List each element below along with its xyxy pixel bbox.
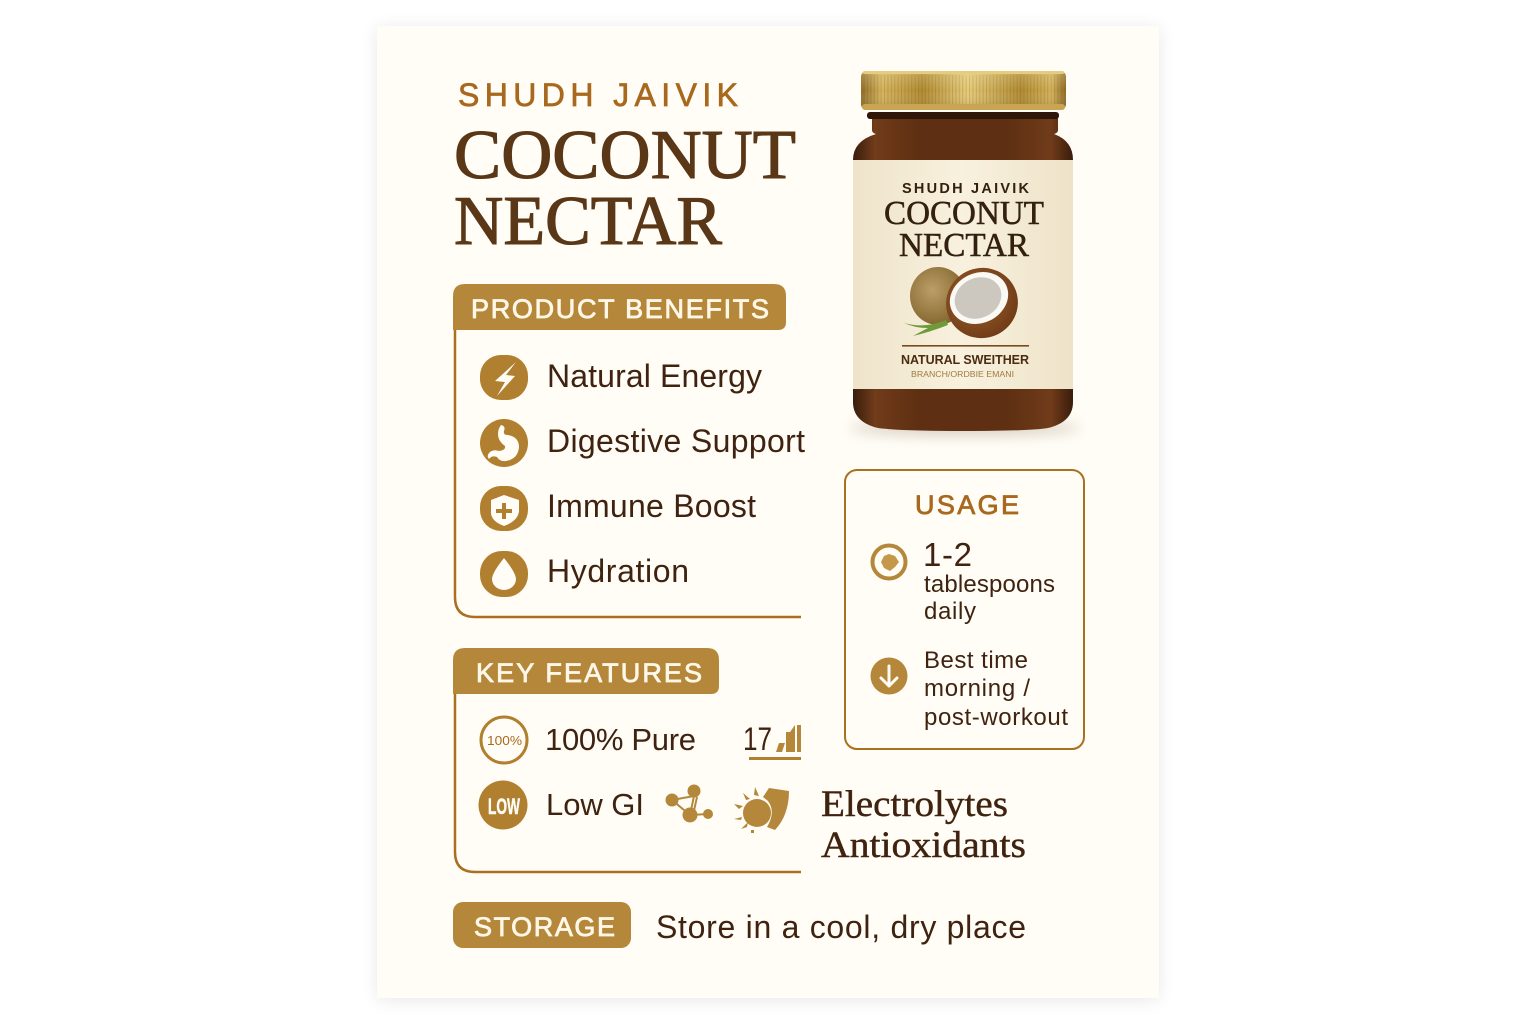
usage amount <box>923 536 1055 625</box>
feature: 100% pure: 100% Pure <box>545 722 696 757</box>
benefit: immune boost: Immune Boost <box>547 488 756 524</box>
usage heading: USAGE <box>915 490 1019 520</box>
label brand: SHUDH JAIVIK <box>902 181 1030 197</box>
jar label <box>853 160 1073 389</box>
icon: sun and leaf <box>734 787 789 833</box>
benefit: digestive support: Digestive Support <box>547 423 805 459</box>
panel: key features <box>453 648 801 872</box>
jar base <box>853 388 1073 431</box>
icon: immune shield <box>480 486 528 531</box>
panel: usage <box>845 470 1084 749</box>
usage amount: 1-2 <box>923 536 972 573</box>
feature: 17 with bars <box>743 721 801 760</box>
benefits heading: PRODUCT BENEFITS <box>471 294 769 324</box>
feature: electrolytes and antioxidants: Antioxidants <box>821 825 1026 866</box>
label title: NECTAR <box>899 227 1029 264</box>
features heading: KEY FEATURES <box>476 658 702 688</box>
usage amount: tablespoons <box>924 571 1055 598</box>
background card <box>377 26 1159 1000</box>
icon: water drop <box>480 551 528 597</box>
feature: electrolytes and antioxidants: Electrolytes <box>821 784 1008 825</box>
icon: down arrow <box>870 658 908 694</box>
storage text: Store in a cool, dry place <box>656 909 1026 945</box>
icon: spoon portion <box>872 546 906 578</box>
storage badge: STORAGE <box>474 912 615 942</box>
feature: electrolytes and antioxidants <box>821 784 1026 866</box>
coconut illustration <box>904 258 1028 348</box>
label title <box>884 195 1044 264</box>
panel: product benefits <box>453 284 805 617</box>
label small print: BRANCH/ORDBIE EMANI <box>911 370 1014 379</box>
feature: low GI: Low GI <box>546 787 644 822</box>
icon: 100 percent: 100% <box>487 733 522 748</box>
icon: low GI: LOW <box>488 794 520 819</box>
panel outline <box>455 326 801 617</box>
jar lid <box>861 71 1066 110</box>
icon: energy bolt <box>480 355 528 400</box>
storage badge <box>453 902 631 948</box>
brand name: SHUDH JAIVIK <box>458 77 738 113</box>
benefit: hydration: Hydration <box>547 553 689 589</box>
label tagline: NATURAL SWEITHER <box>901 353 1029 367</box>
icon: low GI <box>478 780 528 830</box>
title <box>454 117 796 260</box>
icon: stomach <box>480 419 528 467</box>
panel outline <box>455 690 801 872</box>
product jar <box>850 71 1080 435</box>
benefits heading <box>453 284 786 330</box>
usage timing <box>924 647 1068 731</box>
benefit: natural energy: Natural Energy <box>547 358 762 394</box>
usage amount: daily <box>924 598 976 625</box>
title: NECTAR <box>454 183 722 260</box>
icon: 100 percent <box>481 717 527 763</box>
usage timing: post-workout <box>924 704 1068 731</box>
icon: molecule <box>666 784 713 822</box>
jar neck <box>853 116 1073 165</box>
usage timing: morning / <box>924 675 1030 702</box>
label title: COCONUT <box>884 195 1044 232</box>
feature: 17 with bars: 17 <box>743 721 772 757</box>
features heading <box>453 648 719 694</box>
title: COCONUT <box>454 117 796 194</box>
usage timing: Best time <box>924 647 1028 674</box>
